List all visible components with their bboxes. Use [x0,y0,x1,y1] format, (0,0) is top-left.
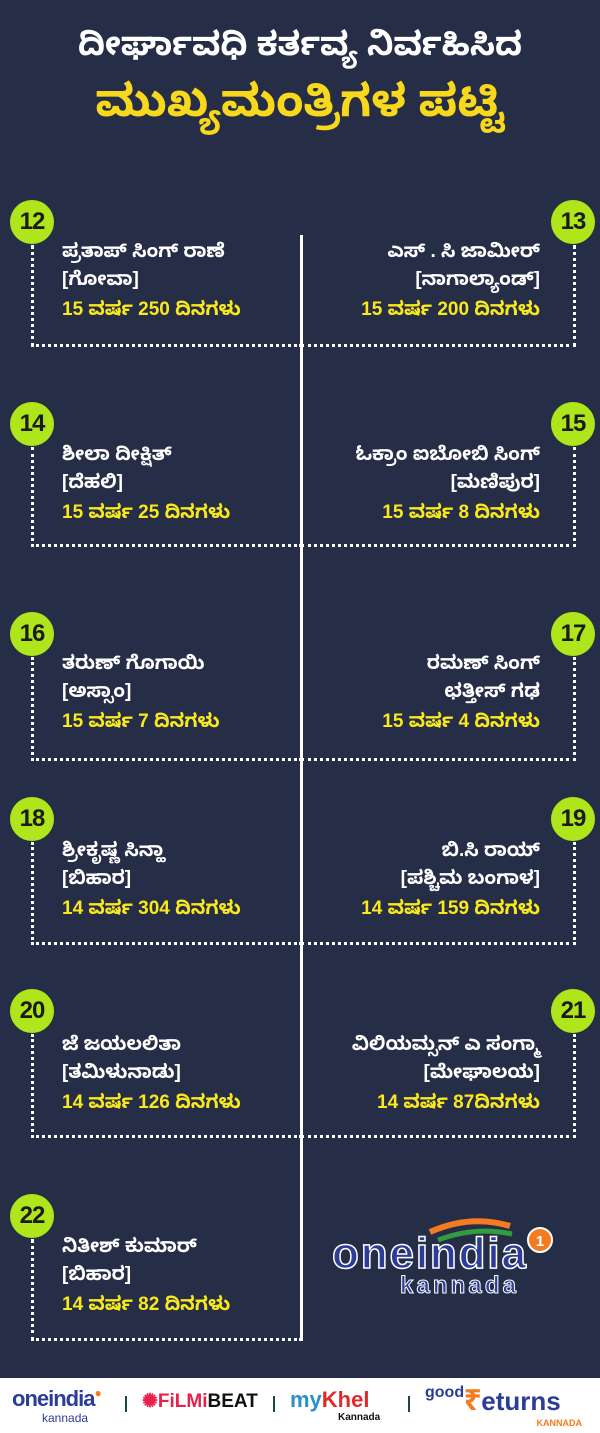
row 20/21 [10,989,595,1138]
logo: oneindia kannada: 1 [536,1233,544,1250]
badge 16 [10,612,54,656]
logo: goodreturns: good₹eturns [425,1384,561,1417]
logo: oneindia: kannada [42,1411,88,1425]
entry 17: 15 ವರ್ಷ 4 ದಿನಗಳು [382,711,540,732]
entry 21: ವಿಲಿಯಮ್ಸನ್ ಎ ಸಂಗ್ಮಾ [352,1034,540,1055]
badge 18: 18 [20,805,44,832]
entry 17: ರಮಣ್ ಸಿಂಗ್ [427,653,540,674]
badge 22: 22 [20,1202,44,1229]
logo: oneindia: oneindia● [12,1386,101,1411]
badge 20 [10,989,54,1033]
entry 22 [62,1236,230,1315]
entry 14 [62,444,230,523]
row 16/17 [10,612,595,761]
entry 13 [361,241,540,320]
entry 22: ನಿತೀಶ್ ಕುಮಾರ್ [62,1236,197,1257]
entry 14: 15 ವರ್ಷ 25 ದಿನಗಳು [62,502,230,523]
badge 13 [551,200,595,244]
entry 21: 14 ವರ್ಷ 87ದಿನಗಳು [377,1092,540,1113]
center line [300,235,303,1341]
entry 16: [ಅಸ್ಸಾಂ] [62,681,131,702]
entry 15: ಓಕ್ರಾಂ ಐಬೋಬಿ ಸಿಂಗ್ [356,444,540,465]
entry 17 [382,653,540,732]
entry 13: 15 ವರ್ಷ 200 ದಿನಗಳು [361,299,540,320]
entry 22: 14 ವರ್ಷ 82 ದಿನಗಳು [62,1294,230,1315]
logo: mykhel: myKhel [290,1387,369,1412]
entry 12: ಪ್ರತಾಪ್ ಸಿಂಗ್ ರಾಣೆ [62,241,225,262]
footer logos [0,1378,600,1433]
entry 16: 15 ವರ್ಷ 7 ದಿನಗಳು [62,711,220,732]
entry 20: [ತಮಿಳುನಾಡು] [62,1062,181,1083]
entry 18: ಶ್ರೀಕೃಷ್ಣ ಸಿನ್ಹಾ [62,840,165,861]
logo: filmibeat: ✺FiLMiBEAT [142,1391,258,1412]
title: ದೀರ್ಘಾವಧಿ ಕರ್ತವ್ಯ ನಿರ್ವಹಿಸಿದ [78,25,522,62]
entry 19: ಬಿ.ಸಿ ರಾಯ್ [442,840,540,861]
logo: oneindia kannada [332,1218,553,1297]
entry 13: [ನಾಗಾಲ್ಯಾಂಡ್] [415,269,540,290]
entry 18: [ಬಿಹಾರ] [62,868,131,889]
logo: goodreturns [425,1384,582,1428]
badge 15: 15 [561,410,585,437]
entry 22: [ಬಿಹಾರ] [62,1264,131,1285]
entry 12 [62,241,241,320]
logo: goodreturns: KANNADA [536,1418,582,1428]
entry 14: ಶೀಲಾ ದೀಕ್ಷಿತ್ [62,444,172,465]
title [78,25,522,135]
title: ಮುಖ್ಯಮಂತ್ರಿಗಳ ಪಟ್ಟಿ [95,75,505,126]
entry 13: ಎಸ್ . ಸಿ ಜಾಮೀರ್ [387,241,540,262]
entry 12: [ಗೋವಾ] [62,269,139,290]
badge 12 [10,200,54,244]
badge 15 [551,402,595,446]
entry 17: ಛತ್ತೀಸ್ ಗಢ [444,681,540,702]
row 14/15 [10,402,595,547]
entry 21: [ಮೇಘಾಲಯ] [424,1062,540,1083]
row 18/19 [10,797,595,945]
entry 20: 14 ವರ್ಷ 126 ದಿನಗಳು [62,1092,241,1113]
badge 18 [10,797,54,841]
entry 14: [ದೆಹಲಿ] [62,472,123,493]
badge 22 [10,1194,54,1238]
entry 18: 14 ವರ್ಷ 304 ದಿನಗಳು [62,898,241,919]
entry 16: ತರುಣ್ ಗೊಗಾಯಿ [62,653,205,674]
badge 14 [10,402,54,446]
entry 20 [62,1034,241,1113]
logo: mykhel [290,1387,380,1423]
entry 19: [ಪಶ್ಚಿಮ ಬಂಗಾಳ] [401,868,540,889]
badge 16: 16 [20,620,44,647]
badge 14: 14 [20,410,44,437]
badge 20: 20 [20,997,44,1024]
badge 19: 19 [561,805,585,832]
badge 17: 17 [561,620,585,647]
entry 19 [361,840,540,919]
badge 21: 21 [561,997,585,1024]
row 12/13 [10,200,595,347]
logo: oneindia [12,1386,101,1425]
entry 15 [356,444,540,523]
badge 21 [551,989,595,1033]
entry 19: 14 ವರ್ಷ 159 ದಿನಗಳು [361,898,540,919]
entry 15: [ಮಣಿಪುರ] [451,472,540,493]
badge 17 [551,612,595,656]
entry 18 [62,840,241,919]
badge 19 [551,797,595,841]
entry 21 [352,1034,542,1113]
entry 12: 15 ವರ್ಷ 250 ದಿನಗಳು [62,299,241,320]
logo: mykhel: Kannada [338,1412,380,1423]
entry 20: ಜೆ ಜಯಲಲಿತಾ [62,1034,181,1055]
logo: oneindia kannada: oneindia [332,1229,527,1278]
row 22 [10,1194,300,1341]
entry 15: 15 ವರ್ಷ 8 ದಿನಗಳು [382,502,540,523]
badge 12: 12 [20,208,44,235]
entry 16 [62,653,220,732]
badge 13: 13 [561,208,585,235]
